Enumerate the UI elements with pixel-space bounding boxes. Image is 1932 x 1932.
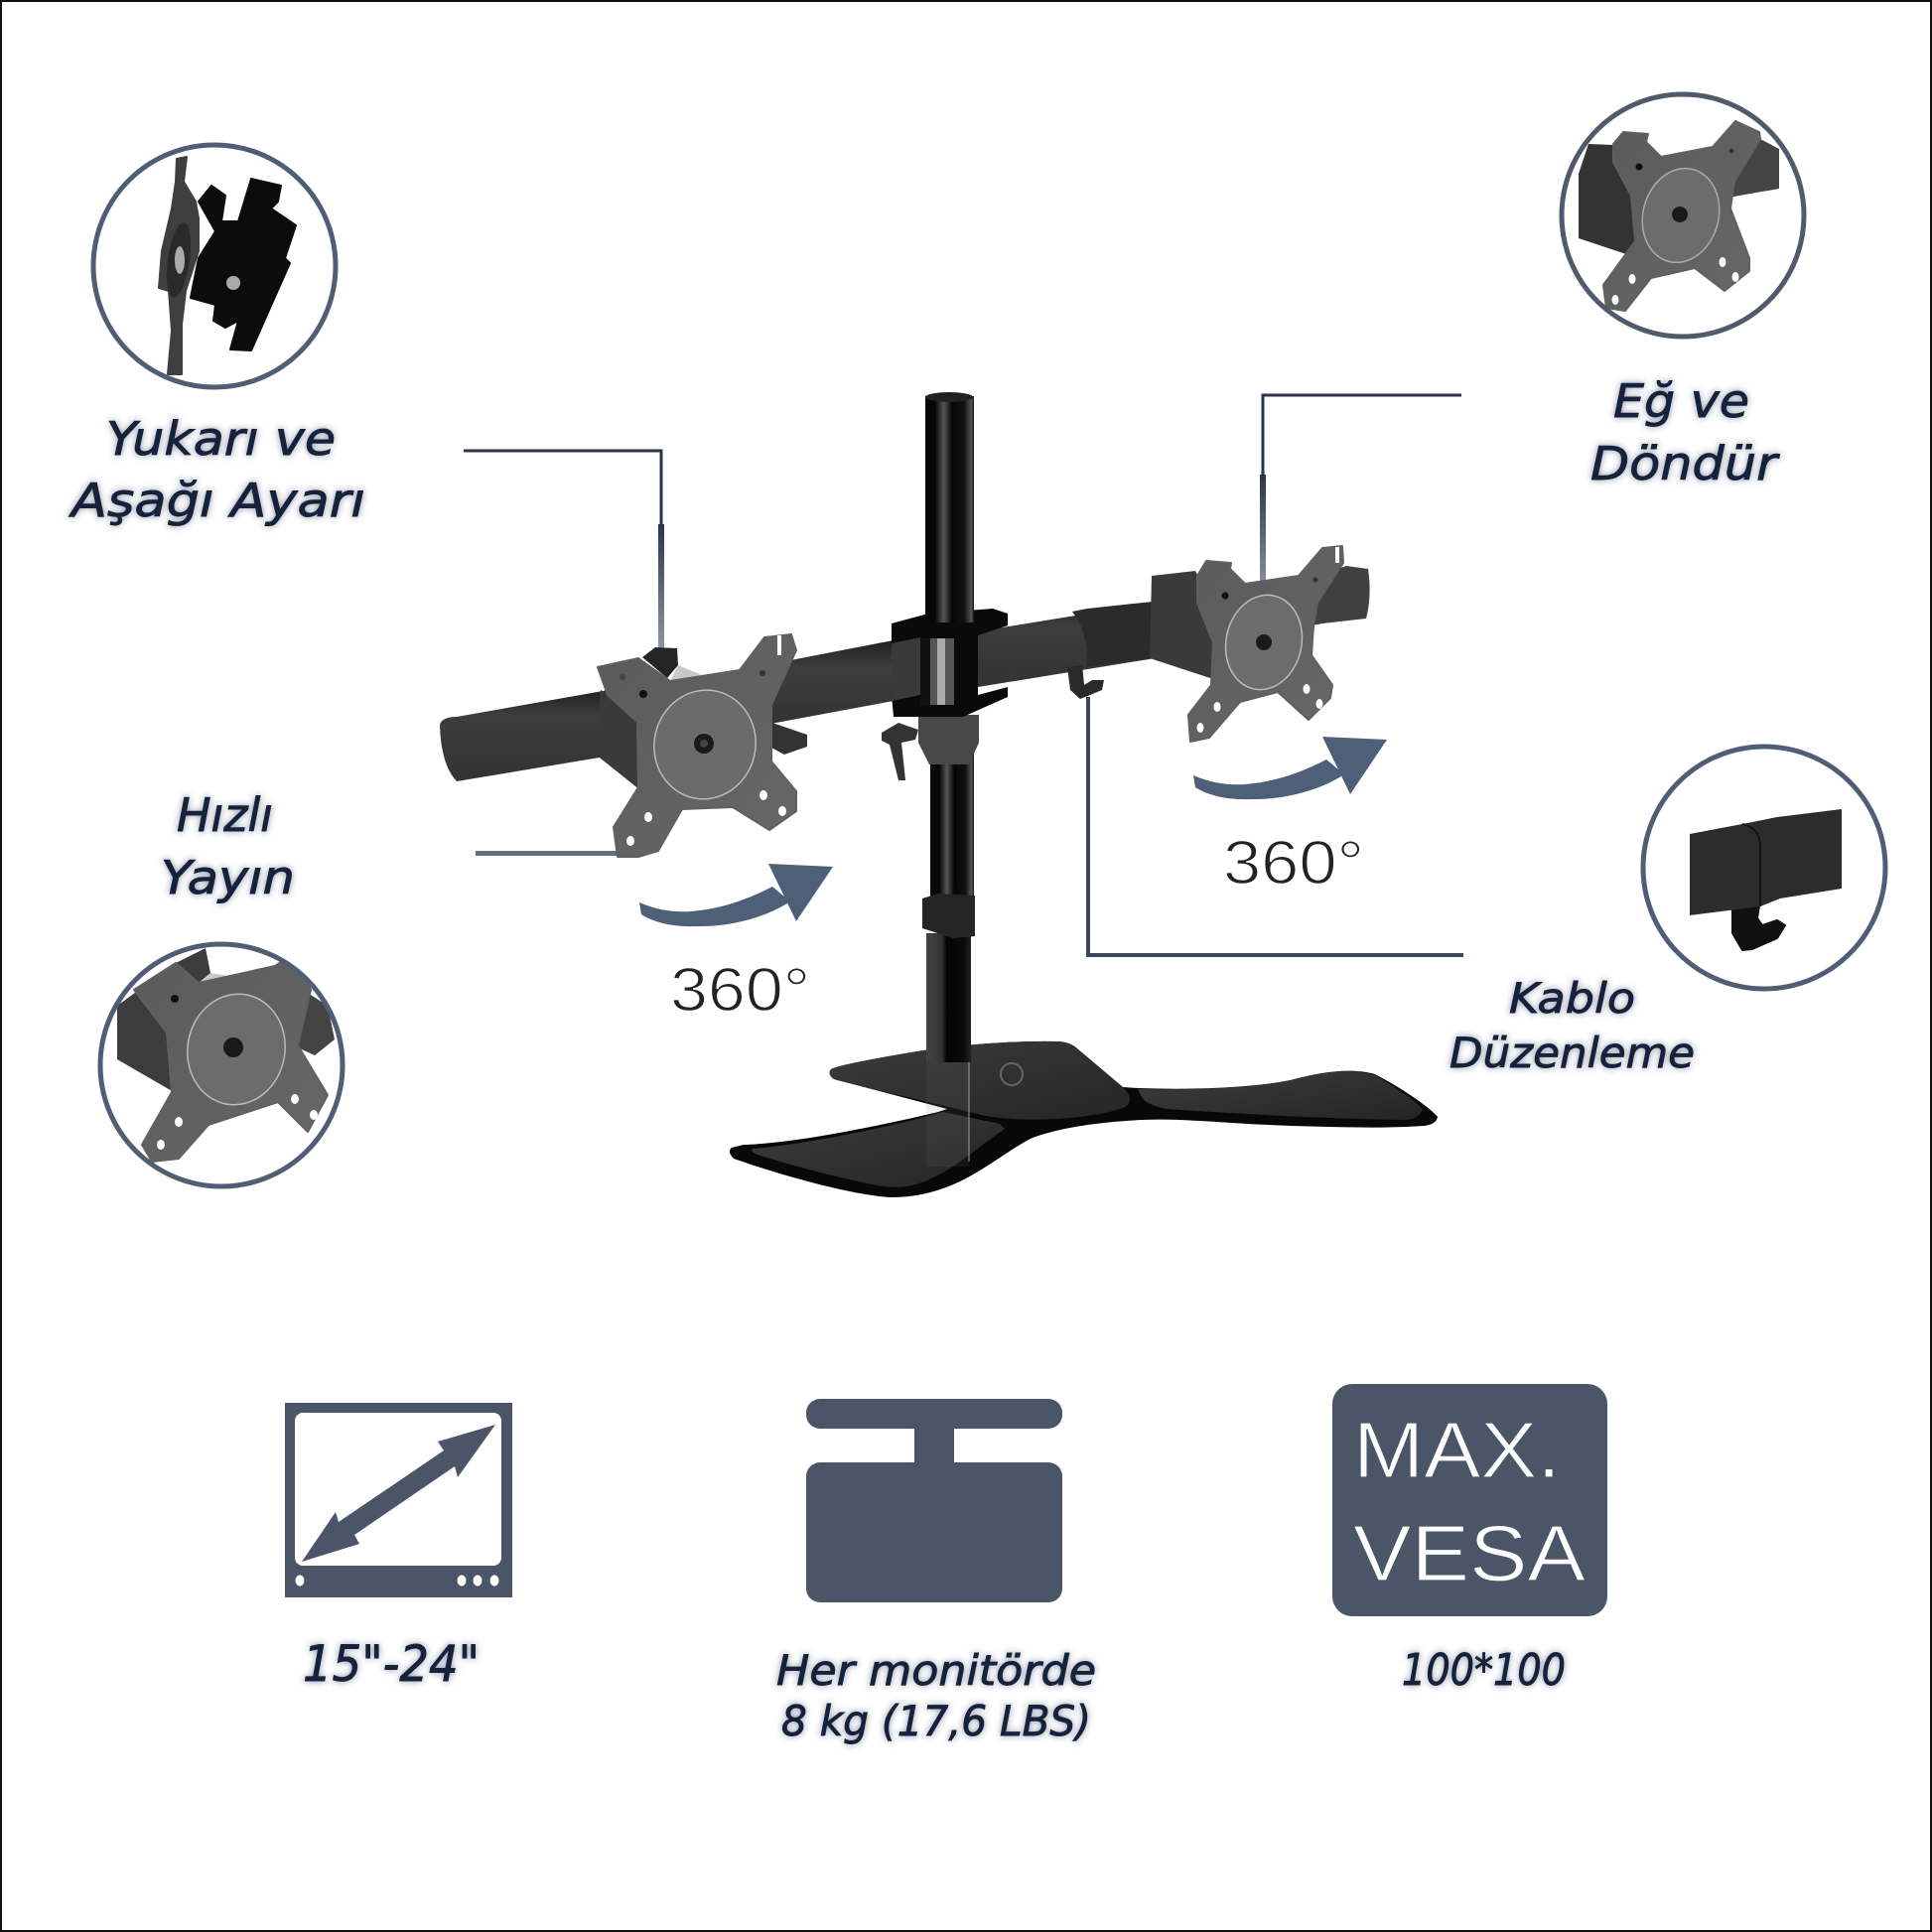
height collar bbox=[922, 894, 975, 938]
arrow: left rotation bbox=[639, 864, 833, 926]
label: left 360 degrees: 360° bbox=[670, 956, 810, 1025]
middle pole bbox=[930, 750, 974, 898]
icon: max VESA: MAX. bbox=[1353, 1406, 1561, 1494]
arrow: right rotation bbox=[1193, 737, 1387, 799]
label: Yukarı ve Aşağı Ayarı: Aşağı Ayarı bbox=[69, 474, 365, 527]
detail circle: up and down adjustment bbox=[93, 145, 336, 387]
left arm end bbox=[440, 687, 635, 781]
label: right 360 degrees: 360° bbox=[1223, 829, 1364, 897]
callout line: tilt and rotate bbox=[1260, 395, 1461, 592]
detail circle: tilt and rotate bbox=[1562, 94, 1804, 337]
right arm bbox=[978, 600, 1173, 687]
arm sleeve bbox=[1072, 600, 1172, 667]
wing knob bbox=[882, 723, 918, 780]
upper pole bbox=[925, 392, 974, 622]
callout line: quick release bbox=[476, 851, 624, 856]
central clamp bbox=[892, 609, 1008, 717]
label: screen size: 15"-24" bbox=[303, 1635, 480, 1693]
right VESA plate bbox=[1188, 546, 1343, 742]
arm between left plate and clamp bbox=[755, 640, 894, 727]
label: Kablo Düzenleme bbox=[1449, 974, 1695, 1077]
callout line: cable management bbox=[1088, 697, 1463, 955]
detail circle: cable management bbox=[1643, 747, 1885, 989]
icon: weight bbox=[806, 1399, 1062, 1602]
icon: max VESA bbox=[1332, 1384, 1607, 1616]
callout line: up and down adjustment bbox=[464, 451, 664, 649]
label: Yukarı ve Aşağı Ayarı bbox=[69, 412, 365, 527]
dual monitor stand bbox=[440, 392, 1438, 1197]
label: Hızlı Yayın: Hızlı bbox=[177, 788, 273, 842]
left VESA plate bbox=[596, 634, 796, 857]
right arm end bbox=[1291, 566, 1370, 629]
label: VESA size: 100*100 bbox=[1402, 1645, 1566, 1696]
cable hook bbox=[1067, 665, 1104, 699]
label: load capacity: Her monitörde bbox=[776, 1646, 1096, 1695]
label: load capacity: 8 kg (17,6 LBS) bbox=[781, 1697, 1091, 1745]
base bbox=[730, 1041, 1438, 1197]
label: Hızlı Yayın bbox=[161, 788, 295, 904]
icon: monitor size bbox=[285, 1403, 512, 1597]
label: Eğ ve Döndür: Döndür bbox=[1590, 437, 1780, 490]
label: load capacity bbox=[776, 1646, 1096, 1745]
label: Yukarı ve Aşağı Ayarı: Yukarı ve bbox=[106, 412, 336, 466]
side knob bbox=[769, 722, 807, 755]
label: Eğ ve Döndür bbox=[1590, 374, 1780, 490]
detail circle: quick release bbox=[100, 944, 343, 1186]
label: Kablo Düzenleme: Düzenleme bbox=[1449, 1029, 1695, 1077]
label: Kablo Düzenleme: Kablo bbox=[1509, 974, 1635, 1023]
right plate housing bbox=[1150, 571, 1231, 685]
lower pole bbox=[926, 933, 971, 1062]
label: Eğ ve Döndür: Eğ ve bbox=[1613, 374, 1749, 428]
lower clamp collar bbox=[918, 715, 979, 764]
label: Hızlı Yayın: Yayın bbox=[161, 851, 295, 904]
icon: max VESA: VESA bbox=[1353, 1509, 1587, 1597]
